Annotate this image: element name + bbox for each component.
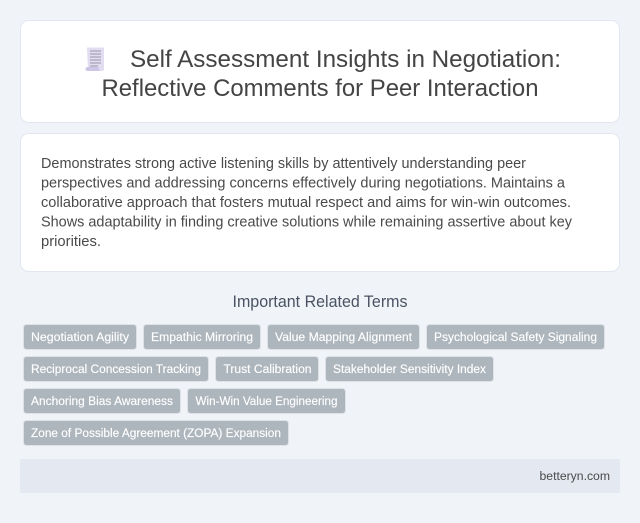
heading: important related terms: Important Related Terms	[232, 293, 408, 311]
tag: Value Mapping Alignment	[275, 330, 413, 344]
text block: description: Demonstrates strong active listening skills by attentively understanding peer	[41, 156, 526, 172]
tag	[24, 420, 288, 446]
tag	[216, 356, 318, 382]
heading: title text	[102, 46, 561, 102]
tag: Anchoring Bias Awareness	[31, 394, 173, 408]
tag: Zone of Possible Agreement (ZOPA) Expansion	[31, 426, 281, 440]
tag list	[24, 324, 604, 446]
tag: Negotiation Agility	[31, 330, 130, 344]
text block: description	[41, 156, 573, 250]
tag	[326, 356, 494, 382]
heading: title text: Self Assessment Insights in Negotiation:	[130, 46, 561, 73]
tag	[24, 324, 136, 350]
tag: Reciprocal Concession Tracking	[31, 362, 201, 376]
footer: betteryn.com	[540, 469, 610, 483]
tag: Empathic Mirroring	[151, 330, 253, 344]
tag	[24, 356, 208, 382]
tag: Psychological Safety Signaling	[434, 330, 597, 344]
text block: description: priorities.	[41, 234, 101, 250]
icon: scroll document	[86, 48, 104, 71]
text block: description: collaborative approach that fosters mutual respect and aims for win-win outcomes.	[41, 195, 571, 211]
text block: description: Shows adaptability in finding creative solutions while remaining assertive about key	[41, 214, 573, 230]
tag: Stakeholder Sensitivity Index	[333, 362, 486, 376]
panel: description	[20, 134, 620, 272]
panel: title	[20, 20, 620, 122]
tag: Trust Calibration	[224, 362, 312, 376]
heading: title text: Reflective Comments for Peer Interaction	[102, 75, 538, 102]
tag	[144, 324, 260, 350]
tag	[268, 324, 420, 350]
text block: description: perspectives and addressing concerns effectively during negotiations. Maintains a	[41, 176, 566, 192]
tag	[188, 388, 346, 414]
tag: Win-Win Value Engineering	[196, 394, 338, 408]
footer	[20, 459, 620, 493]
tag	[24, 388, 180, 414]
tag	[426, 324, 604, 350]
